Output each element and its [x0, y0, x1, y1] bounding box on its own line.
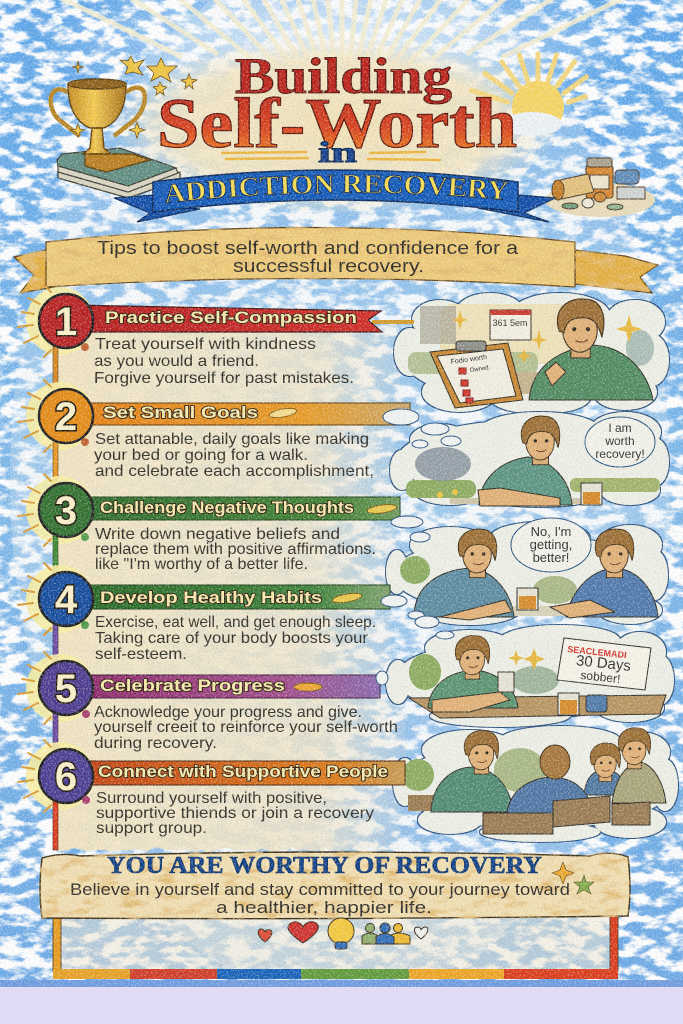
man in green sweater	[431, 731, 513, 812]
icon: pale heart	[414, 927, 428, 939]
leaf ornament 3	[367, 503, 397, 515]
clipboard checklist: Fodio worth	[450, 354, 488, 366]
scene 3: two men talking	[400, 518, 658, 620]
wall calendar note: 361 5em	[492, 318, 528, 328]
parchment subtitle banner	[14, 228, 658, 293]
room backdrop	[408, 304, 654, 394]
body 6: support group.	[96, 820, 207, 837]
blue banner: Addiction Recovery	[114, 169, 557, 223]
icon: gold cup	[51, 79, 150, 172]
wooden table	[409, 695, 666, 718]
step 2	[18, 380, 410, 487]
burst 2	[18, 380, 94, 452]
scroll stars	[552, 862, 594, 894]
closing message	[70, 880, 570, 917]
left man in blue-green shirt	[414, 529, 514, 620]
body 1: Forgive yourself for past mistakes.	[94, 370, 354, 387]
speech bubble: No, I'm getting better	[511, 518, 591, 572]
speech bubble: No, I'm getting better: No, I'm	[531, 524, 571, 539]
badge 6	[39, 749, 93, 803]
badge 2: 2	[55, 395, 77, 439]
body 3: Write down negative beliefs and	[95, 526, 340, 543]
woman	[584, 743, 627, 795]
thought cloud 1	[394, 293, 669, 414]
grey tree sketch	[415, 447, 471, 481]
badge 2	[39, 389, 93, 443]
scene 5: support group	[402, 728, 666, 834]
ribbon 2	[70, 403, 410, 425]
sun	[471, 54, 587, 136]
burst 5	[18, 652, 94, 724]
sun rays behind title	[27, 0, 657, 71]
thought cloud 3	[386, 522, 668, 625]
speech bubble: I am worth recovery	[585, 417, 655, 467]
closing message: a healthier, happier life.	[216, 898, 432, 917]
title line: Building: Building	[235, 49, 452, 105]
body 4: Taking care of your body boosts your	[95, 630, 369, 647]
heading 4: Develop Healthy Habits	[100, 588, 322, 607]
ribbon 6	[70, 761, 405, 785]
heading 3: Challenge Negative Thoughts	[100, 498, 354, 517]
heading 6: Connect with Supportive People	[98, 762, 388, 781]
closing message: Believe in yourself and stay committed to your journey toward	[70, 880, 570, 899]
body 5: yourself creeit to reinforce your self-worth	[94, 719, 398, 736]
body 4: Exercise, eat well, and get enough sleep.	[95, 614, 376, 631]
trophy on books	[51, 79, 180, 198]
subtitle text	[97, 238, 519, 276]
speech bubble: No, I'm getting better: getting,	[530, 537, 572, 552]
title line: Self-Worth: Self-Worth	[157, 85, 517, 163]
ribbon 1	[70, 305, 382, 332]
multicolour strip	[53, 969, 618, 979]
step 1	[18, 285, 382, 400]
step 6	[18, 740, 405, 850]
calendar: 30 days sober: sobber!	[580, 668, 621, 686]
calendar: 30 days sober: SEACLEMADI	[567, 644, 627, 660]
leaf ornament 2	[269, 407, 297, 419]
bottom frame	[53, 915, 618, 979]
speech bubble: No, I'm getting better: better!	[533, 550, 569, 565]
speech bubble: I am worth recovery: worth	[604, 434, 635, 448]
parchment glow behind title	[110, 35, 560, 215]
title	[157, 49, 517, 169]
body 2: Set attanable, daily goals like making	[95, 431, 369, 448]
step 4	[18, 563, 390, 668]
badge 1: 1	[55, 300, 77, 344]
leaf ornament 5	[294, 683, 322, 691]
seated man	[478, 416, 572, 506]
closing parchment scroll	[40, 852, 630, 919]
man with glass	[428, 636, 518, 712]
blue banner: Addiction Recovery: ADDICTION RECOVERY	[164, 174, 509, 204]
badge 3: 3	[55, 489, 77, 533]
clipboard checklist: Owned	[469, 365, 489, 374]
speech bubble: I am worth recovery: recovery!	[595, 447, 645, 461]
body 6: Surround yourself with positive,	[96, 790, 327, 807]
thought cloud 4	[386, 625, 674, 727]
body 2: your bed or going for a walk.	[94, 447, 308, 464]
badge 3	[39, 483, 93, 537]
step 5	[18, 652, 398, 760]
leaf ornament 4	[332, 591, 362, 605]
badge 4: 4	[55, 578, 78, 622]
older man in olive jacket	[612, 728, 666, 803]
body 1: Treat yourself with kindness	[95, 336, 316, 353]
ribbon 4	[70, 585, 390, 609]
heading 1: Practice Self-Compassion	[105, 308, 357, 327]
glass on table	[517, 588, 538, 610]
grassy ground	[406, 478, 660, 504]
heading 5: Celebrate Progress	[100, 676, 285, 695]
man seen from behind	[507, 745, 592, 813]
stars around trophy	[71, 56, 197, 138]
ribbon 3	[70, 497, 400, 520]
bottom icons	[258, 918, 428, 949]
scene 4: 30 days sober	[409, 636, 666, 718]
clipboard checklist	[430, 341, 523, 408]
foliage and wall backdrop	[409, 654, 559, 694]
subtitle text: Tips to boost self-worth and confidence for a	[97, 238, 519, 258]
body 3: replace them with positive affirmations.	[95, 541, 376, 558]
icon: light bulb	[328, 918, 354, 949]
body 6: supportive thiends or join a recovery	[96, 805, 374, 822]
body 5: Acknowledge your progress and give.	[94, 704, 362, 721]
glass of drink	[581, 483, 602, 505]
scene 2: man writing, worth recovery	[406, 416, 660, 506]
burst 6	[18, 740, 94, 812]
burst 4	[18, 563, 94, 635]
wooden benches	[483, 796, 650, 834]
gold sparkles	[452, 310, 642, 363]
body 1: as you would a friend.	[94, 353, 259, 370]
lavender footer band	[0, 987, 683, 1024]
badge 4	[39, 572, 93, 626]
thought cloud 2	[390, 412, 669, 507]
badge 6: 6	[55, 755, 77, 799]
subtitle text: successful recovery.	[233, 256, 424, 276]
body 3: like "I'm worthy of a better life.	[95, 556, 308, 573]
glass and jar	[558, 693, 607, 715]
icon: large heart	[288, 922, 318, 943]
ribbon 5	[70, 675, 380, 698]
small thought bubbles	[376, 409, 461, 685]
calendar: 30 days sober: 30 Days	[575, 652, 632, 675]
foliage backdrop	[402, 748, 546, 811]
title line: in: in	[318, 136, 357, 169]
man in green sweater	[529, 299, 653, 400]
body 4: self-esteem.	[95, 646, 187, 663]
body 6	[82, 790, 374, 837]
step 3	[18, 474, 400, 586]
stars	[508, 648, 545, 670]
scene 1: man with checklist	[408, 299, 654, 408]
closing heading: YOU ARE WORTHY OF RECOVERY	[107, 853, 542, 879]
wall calendar note	[490, 310, 531, 340]
panel: step text backgrounds	[56, 325, 406, 850]
icon: small heart	[258, 929, 272, 942]
icon: people group	[362, 923, 410, 944]
pill bottles and pills	[545, 158, 655, 217]
body 1	[81, 336, 354, 387]
body 2	[81, 431, 374, 480]
body 3	[81, 526, 376, 573]
connector from ribbon 1	[372, 320, 414, 324]
body 5	[82, 704, 398, 752]
body 2: and celebrate each accomplishment,	[95, 463, 374, 480]
body 4	[81, 614, 376, 663]
badge 5	[39, 661, 93, 715]
right man in denim shirt	[550, 529, 658, 618]
body 5: during recovery.	[94, 735, 217, 752]
badge 1	[39, 294, 93, 348]
heading 2: Set Small Goals	[103, 403, 258, 422]
foliage backdrop	[400, 556, 620, 616]
badge 5: 5	[55, 667, 77, 711]
calendar: 30 days sober	[557, 638, 651, 690]
gold streaks beside in	[222, 152, 440, 160]
burst 3	[18, 474, 94, 546]
speech bubble: I am worth recovery: I am	[608, 421, 632, 435]
thought cloud 5	[393, 726, 678, 842]
icon: stack of books	[57, 148, 180, 198]
burst 1	[18, 285, 94, 357]
